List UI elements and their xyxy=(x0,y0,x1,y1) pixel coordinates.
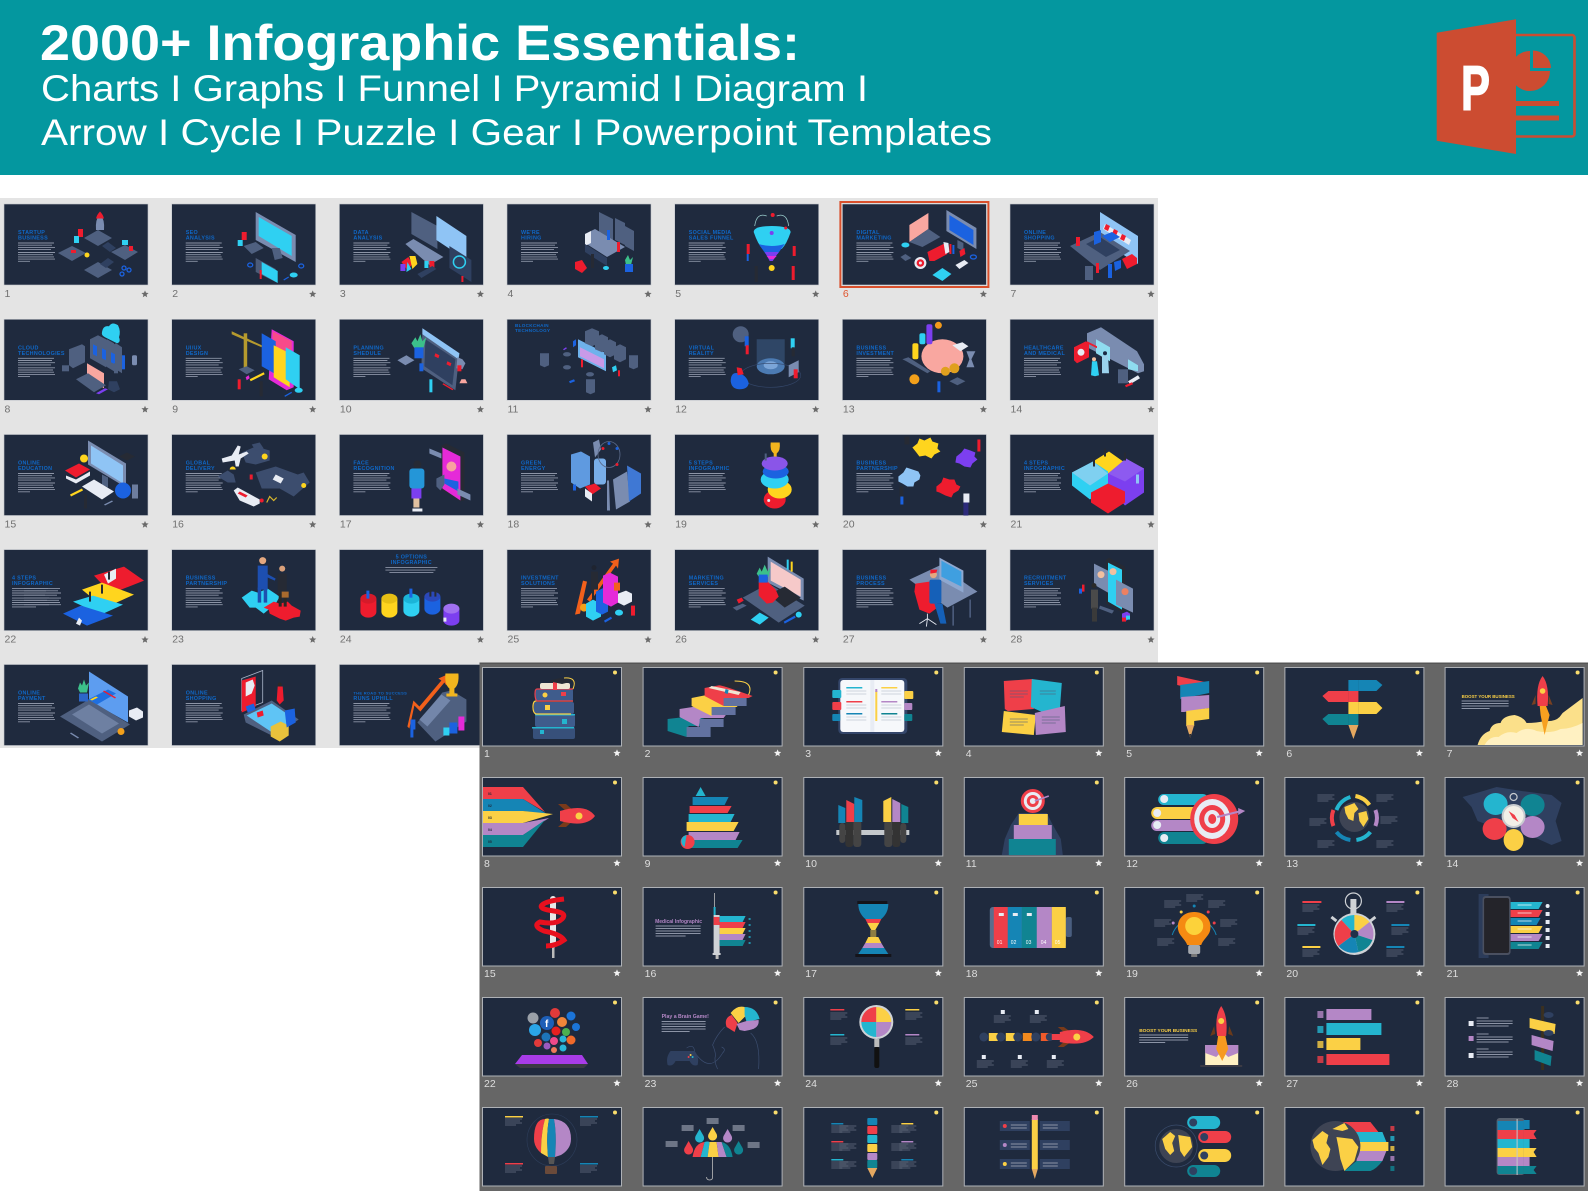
dark slide 27 horizontal bars: 27 xyxy=(1286,1078,1298,1090)
slide 1 startup business: 1 xyxy=(4,288,10,300)
slide 4 we're hiring: HIRING xyxy=(521,236,542,242)
slide 1 startup business: BUSINESS xyxy=(18,236,48,242)
slide 31 the road to success runs uphill: RUNS UPHILL xyxy=(353,696,393,702)
slide 16 global delivery: DELIVERY xyxy=(186,466,215,472)
slide 29 online payment: PAYMENT xyxy=(18,696,46,702)
slide 11 blockchain technology xyxy=(507,319,652,415)
dark slide 14 compass petals: 14 xyxy=(1447,858,1458,870)
slide 5 social media sales funnel: SOCIAL MEDIA xyxy=(689,230,731,236)
dark slide 7 boost your business rocket xyxy=(1445,668,1584,760)
dark slide 28 pen ribbons: 28 xyxy=(1447,1078,1458,1090)
slide 18 green energy: 18 xyxy=(508,518,519,530)
dark slide 1 graduation books: 1 xyxy=(484,748,490,760)
slide 7 online shopping: ONLINE xyxy=(1024,230,1046,236)
dark slide 35 phone bands xyxy=(1445,1108,1584,1186)
slide 10 planning schedule: PLANNING xyxy=(353,345,384,351)
dark slide 9 pyramid: 9 xyxy=(645,858,651,870)
slide 16 global delivery: GLOBAL xyxy=(186,460,211,466)
slide 12 virtual reality: 12 xyxy=(675,403,687,415)
slide 26 marketing services: SERVICES xyxy=(689,581,718,587)
subtitle line 2: Arrow I Cycle I Puzzle I Gear I Powerpoint Templates xyxy=(41,112,992,153)
dark slide 15 red ribbon thermometer xyxy=(482,888,622,980)
slide 24 5 options infographic xyxy=(339,550,484,646)
dark slide 12 target bars: 12 xyxy=(1126,858,1138,870)
dark slide 22 social media tree xyxy=(482,998,622,1090)
slide 15 online education xyxy=(4,434,149,530)
dark slide 34 big globe bands xyxy=(1285,1108,1424,1186)
dark slide 21 phone ribbons: 21 xyxy=(1447,968,1458,980)
dark slide 12 target bars xyxy=(1125,778,1264,870)
slide 2 SEO analysis: SEO xyxy=(186,230,198,236)
dark slide 11 target stack xyxy=(964,778,1103,870)
dark slide 22 social media tree: 22 xyxy=(484,1078,496,1090)
dark slide 25 timeline rocket: 25 xyxy=(966,1078,978,1090)
slide 14 healthcare and medical: 14 xyxy=(1010,403,1022,415)
slide 25 investment solutions: SOLUTIONS xyxy=(521,581,555,587)
slide 31 the road to success runs uphill: THE ROAD TO SUCCESS xyxy=(353,690,407,696)
slide 1 startup business xyxy=(4,204,149,300)
dark slide 15 red ribbon thermometer: 15 xyxy=(484,968,496,980)
slide 7 online shopping xyxy=(1010,204,1155,300)
slide 3 data analysis: ANALYSIS xyxy=(353,236,383,242)
dark slide 16 medical infographic syringe xyxy=(643,888,782,980)
slide 26 marketing services xyxy=(675,550,819,646)
slide 20 business partnership puzzle: BUSINESS xyxy=(856,460,886,466)
dark slide 24 magnifier: 24 xyxy=(805,1078,817,1090)
slide 23 business partnership handshake: BUSINESS xyxy=(186,576,216,582)
slide 7 online shopping: 7 xyxy=(1010,288,1016,300)
panel: flat infographic slide sorter xyxy=(480,662,1588,1191)
dark slide 2 stair books xyxy=(643,668,782,760)
slide 22 4 steps infographic blocks xyxy=(4,550,149,646)
slide 30 online shopping 2: SHOPPING xyxy=(186,696,217,702)
slide 21 4 steps infographic: 4 STEPS xyxy=(1024,460,1048,466)
slide 13 business investment: INVESTMENT xyxy=(856,351,895,357)
dark slide 19 light bulb xyxy=(1125,888,1264,980)
slide 25 investment solutions: 25 xyxy=(508,634,519,646)
dark slide 25 timeline rocket xyxy=(964,998,1103,1090)
dark slide 5 pencil ribbons xyxy=(1125,668,1264,760)
dark slide 23 brain game xyxy=(643,998,782,1090)
slide 19 5 steps infographic: 19 xyxy=(675,518,687,530)
slide 26 marketing services: MARKETING xyxy=(689,576,724,582)
header banner xyxy=(0,0,1588,175)
slide 2 SEO analysis: 2 xyxy=(172,288,178,300)
slide 9 UI UX design: DESIGN xyxy=(186,351,208,357)
dark slide 29 hot air balloon xyxy=(482,1108,622,1186)
dark slide 17 hourglass: 17 xyxy=(805,968,817,980)
dark slide 23 brain game: Play a Brain Game! xyxy=(662,1014,709,1020)
slide 21 4 steps infographic xyxy=(1010,434,1155,530)
slide 3 data analysis xyxy=(339,204,484,300)
slide 28 recruitment services: 28 xyxy=(1010,634,1022,646)
dark slide 32 pencil labels xyxy=(964,1108,1103,1186)
slide 2 SEO analysis: ANALYSIS xyxy=(186,236,215,242)
dark slide 8 rocket bands: 04 xyxy=(488,828,492,832)
dark slide 8 rocket bands: 03 xyxy=(488,816,492,820)
slide 29 online payment: ONLINE xyxy=(18,690,40,696)
dark slide 26 boost rocket laptop: BOOST YOUR BUSINESS xyxy=(1139,1028,1198,1034)
slide 29 online payment xyxy=(4,664,148,746)
dark slide 3 notebook: 3 xyxy=(805,748,811,760)
dark slide 18 battery: 05 xyxy=(1055,940,1061,946)
dark slide 11 target stack: 11 xyxy=(966,858,977,870)
dark slide 26 boost rocket laptop: 26 xyxy=(1126,1078,1138,1090)
dark slide 14 compass petals xyxy=(1445,778,1584,870)
dark slide 2 stair books: 2 xyxy=(645,748,651,760)
slide 15 online education: ONLINE xyxy=(18,460,40,466)
dark slide 1 graduation books xyxy=(482,668,622,760)
slide 8 cloud technologies: TECHNOLOGIES xyxy=(18,351,65,357)
slide 26 marketing services: 26 xyxy=(675,634,687,646)
dark slide 3 notebook xyxy=(804,668,943,760)
dark slide 27 horizontal bars xyxy=(1285,998,1424,1090)
slide 4 we're hiring xyxy=(507,204,652,300)
dark slide 4 sticky notes: 4 xyxy=(966,748,972,760)
slide 30 online shopping 2 xyxy=(172,664,316,746)
dark slide 33 globe pills xyxy=(1125,1108,1264,1186)
dark slide 7 boost your business rocket: 7 xyxy=(1447,748,1453,760)
dark slide 13 globe cycle: 13 xyxy=(1286,858,1298,870)
dark slide 20 stopwatch xyxy=(1285,888,1424,980)
slide 28 recruitment services: SERVICES xyxy=(1024,581,1054,587)
dark slide 8 rocket bands: 01 xyxy=(488,792,492,796)
dark slide 22 social media tree: f xyxy=(545,1019,549,1030)
slide 19 5 steps infographic: INFOGRAPHIC xyxy=(689,466,730,472)
slide 13 business investment: BUSINESS xyxy=(856,345,886,351)
dark slide 18 battery: 18 xyxy=(966,968,978,980)
slide 27 business process: PROCESS xyxy=(856,581,885,587)
dark slide 26 boost rocket laptop xyxy=(1125,998,1264,1090)
slide 17 face recognition: RECOGNITION xyxy=(353,466,395,472)
slide 8 cloud technologies: 8 xyxy=(4,403,10,415)
slide 10 planning schedule xyxy=(339,319,484,415)
slide 1 startup business: STARTUP xyxy=(18,230,45,236)
slide 23 business partnership handshake: 23 xyxy=(172,634,184,646)
dark slide 10 dumbbell: 10 xyxy=(805,858,817,870)
slide 24 5 options infographic: 24 xyxy=(340,634,352,646)
slide 5 social media sales funnel: 5 xyxy=(675,288,681,300)
slide 20 business partnership puzzle: PARTNERSHIP xyxy=(856,466,898,472)
dark slide 17 hourglass xyxy=(804,888,943,980)
slide 21 4 steps infographic: INFOGRAPHIC xyxy=(1024,466,1065,472)
slide 17 face recognition: 17 xyxy=(340,518,352,530)
dark slide 8 rocket bands: 05 xyxy=(488,840,492,844)
slide 22 4 steps infographic blocks: 22 xyxy=(4,634,16,646)
slide 16 global delivery xyxy=(172,434,316,530)
slide 27 business process: BUSINESS xyxy=(856,576,886,582)
slide 11 blockchain technology: 11 xyxy=(508,403,519,415)
dark slide 8 rocket bands xyxy=(482,778,622,870)
dark slide 18 battery: 03 xyxy=(1026,940,1032,946)
slide 25 investment solutions: INVESTMENT xyxy=(521,576,559,582)
slide 9 UI UX design: 9 xyxy=(172,403,178,415)
icon: PowerPoint logo xyxy=(1437,19,1574,154)
slide 28 recruitment services xyxy=(1010,550,1155,646)
slide 22 4 steps infographic blocks: 4 STEPS xyxy=(12,576,36,582)
dark slide 10 dumbbell xyxy=(804,778,943,870)
slide 3 data analysis: 3 xyxy=(340,288,346,300)
slide 20 business partnership puzzle xyxy=(842,434,987,530)
dark slide 9 pyramid xyxy=(643,778,782,870)
slide 13 business investment xyxy=(842,319,987,415)
slide 27 business process xyxy=(842,550,987,646)
slide 12 virtual reality: VIRTUAL xyxy=(689,345,715,351)
slide 17 face recognition: FACE xyxy=(353,460,369,466)
slide 4 we're hiring: 4 xyxy=(508,288,514,300)
dark slide 21 phone ribbons xyxy=(1445,888,1584,980)
dark slide 5 pencil ribbons: 5 xyxy=(1126,748,1132,760)
slide 9 UI UX design: UI/UX xyxy=(186,345,202,351)
slide 18 green energy xyxy=(507,434,652,530)
slide 12 virtual reality xyxy=(675,319,819,415)
slide 12 virtual reality: REALITY xyxy=(689,351,714,357)
dark slide 18 battery xyxy=(964,888,1103,980)
slide 18 green energy: ENERGY xyxy=(521,466,546,472)
slide 10 planning schedule: 10 xyxy=(340,403,352,415)
slide 14 healthcare and medical: AND MEDICAL xyxy=(1024,351,1065,357)
slide 16 global delivery: 16 xyxy=(172,518,184,530)
dark slide 24 magnifier xyxy=(804,998,943,1090)
panel: isometric slide sorter xyxy=(0,198,1158,748)
dark slide 13 globe cycle xyxy=(1285,778,1424,870)
icon: PowerPoint logo: P xyxy=(1461,54,1490,124)
slide 30 online shopping 2: ONLINE xyxy=(186,690,208,696)
slide 4 we're hiring: WE'RE xyxy=(521,230,540,236)
dark slide 7 boost your business rocket: BOOST YOUR BUSINESS xyxy=(1462,694,1515,699)
slide 11 blockchain technology: BLOCKCHAIN xyxy=(515,323,549,328)
dark slide 6 signpost pencil: 6 xyxy=(1286,748,1292,760)
dark slide 20 stopwatch: 20 xyxy=(1286,968,1298,980)
dark slide 6 signpost pencil xyxy=(1285,668,1424,760)
slide 5 social media sales funnel xyxy=(675,204,819,300)
slide 6 digital marketing (selected) xyxy=(840,202,988,300)
dark slide 23 brain game: 23 xyxy=(645,1078,656,1090)
slide 19 5 steps infographic xyxy=(675,434,819,530)
slide 14 healthcare and medical xyxy=(1010,319,1155,415)
slide 8 cloud technologies: CLOUD xyxy=(18,345,39,351)
slide 24 5 options infographic: 5 OPTIONS xyxy=(396,555,427,561)
slide 31 the road to success runs uphill xyxy=(339,664,483,746)
slide 3 data analysis: DATA xyxy=(353,230,369,236)
slide 20 business partnership puzzle: 20 xyxy=(843,518,855,530)
slide 13 business investment: 13 xyxy=(843,403,855,415)
slide 6 digital marketing (selected): 6 xyxy=(843,288,849,300)
dark slide 16 medical infographic syringe: Medical Infographic xyxy=(655,919,702,925)
slide 15 online education: 15 xyxy=(4,518,16,530)
slide 24 5 options infographic: INFOGRAPHIC xyxy=(391,560,432,566)
dark slide 4 sticky notes xyxy=(964,668,1103,760)
slide 15 online education: EDUCATION xyxy=(18,466,52,472)
slide 6 digital marketing (selected): DIGITAL xyxy=(856,230,880,236)
dark slide 30 umbrella drops xyxy=(643,1108,782,1186)
dark slide 18 battery: 02 xyxy=(1011,940,1017,946)
slide 5 social media sales funnel: SALES FUNNEL xyxy=(689,236,734,242)
slide 17 face recognition xyxy=(339,434,484,530)
dark slide 18 battery: 01 xyxy=(997,940,1003,946)
slide 18 green energy: GREEN xyxy=(521,460,542,466)
subtitle line 1: Charts I Graphs I Funnel I Pyramid I Diagram I xyxy=(41,68,868,109)
slide 25 investment solutions xyxy=(507,550,652,646)
dark slide 28 pen ribbons xyxy=(1445,998,1584,1090)
dark slide 18 battery: 04 xyxy=(1041,940,1047,946)
dark slide 8 rocket bands: 02 xyxy=(488,804,492,808)
title: 2000+ Infographic Essentials: xyxy=(40,15,800,71)
dark slide 16 medical infographic syringe: 16 xyxy=(645,968,656,980)
slide 21 4 steps infographic: 21 xyxy=(1010,518,1022,530)
slide 23 business partnership handshake xyxy=(172,550,316,646)
dark slide 19 light bulb: 19 xyxy=(1126,968,1138,980)
slide 11 blockchain technology: TECHNOLOGY xyxy=(515,328,550,333)
slide 9 UI UX design xyxy=(172,319,316,415)
slide 23 business partnership handshake: PARTNERSHIP xyxy=(186,581,227,587)
slide 6 digital marketing (selected): MARKETING xyxy=(856,236,892,242)
dark slide 31 stacked pencil xyxy=(804,1108,943,1186)
slide 2 SEO analysis xyxy=(172,204,316,300)
slide 28 recruitment services: RECRUITMENT xyxy=(1024,576,1067,582)
slide 7 online shopping: SHOPPING xyxy=(1024,236,1055,242)
slide 8 cloud technologies xyxy=(4,319,149,415)
slide 10 planning schedule: SHEDULE xyxy=(353,351,381,357)
slide 22 4 steps infographic blocks: INFOGRAPHIC xyxy=(12,581,53,587)
slide 14 healthcare and medical: HEALTHCARE xyxy=(1024,345,1064,351)
slide 19 5 steps infographic: 5 STEPS xyxy=(689,460,713,466)
dark slide 8 rocket bands: 8 xyxy=(484,858,490,870)
slide 27 business process: 27 xyxy=(843,634,855,646)
